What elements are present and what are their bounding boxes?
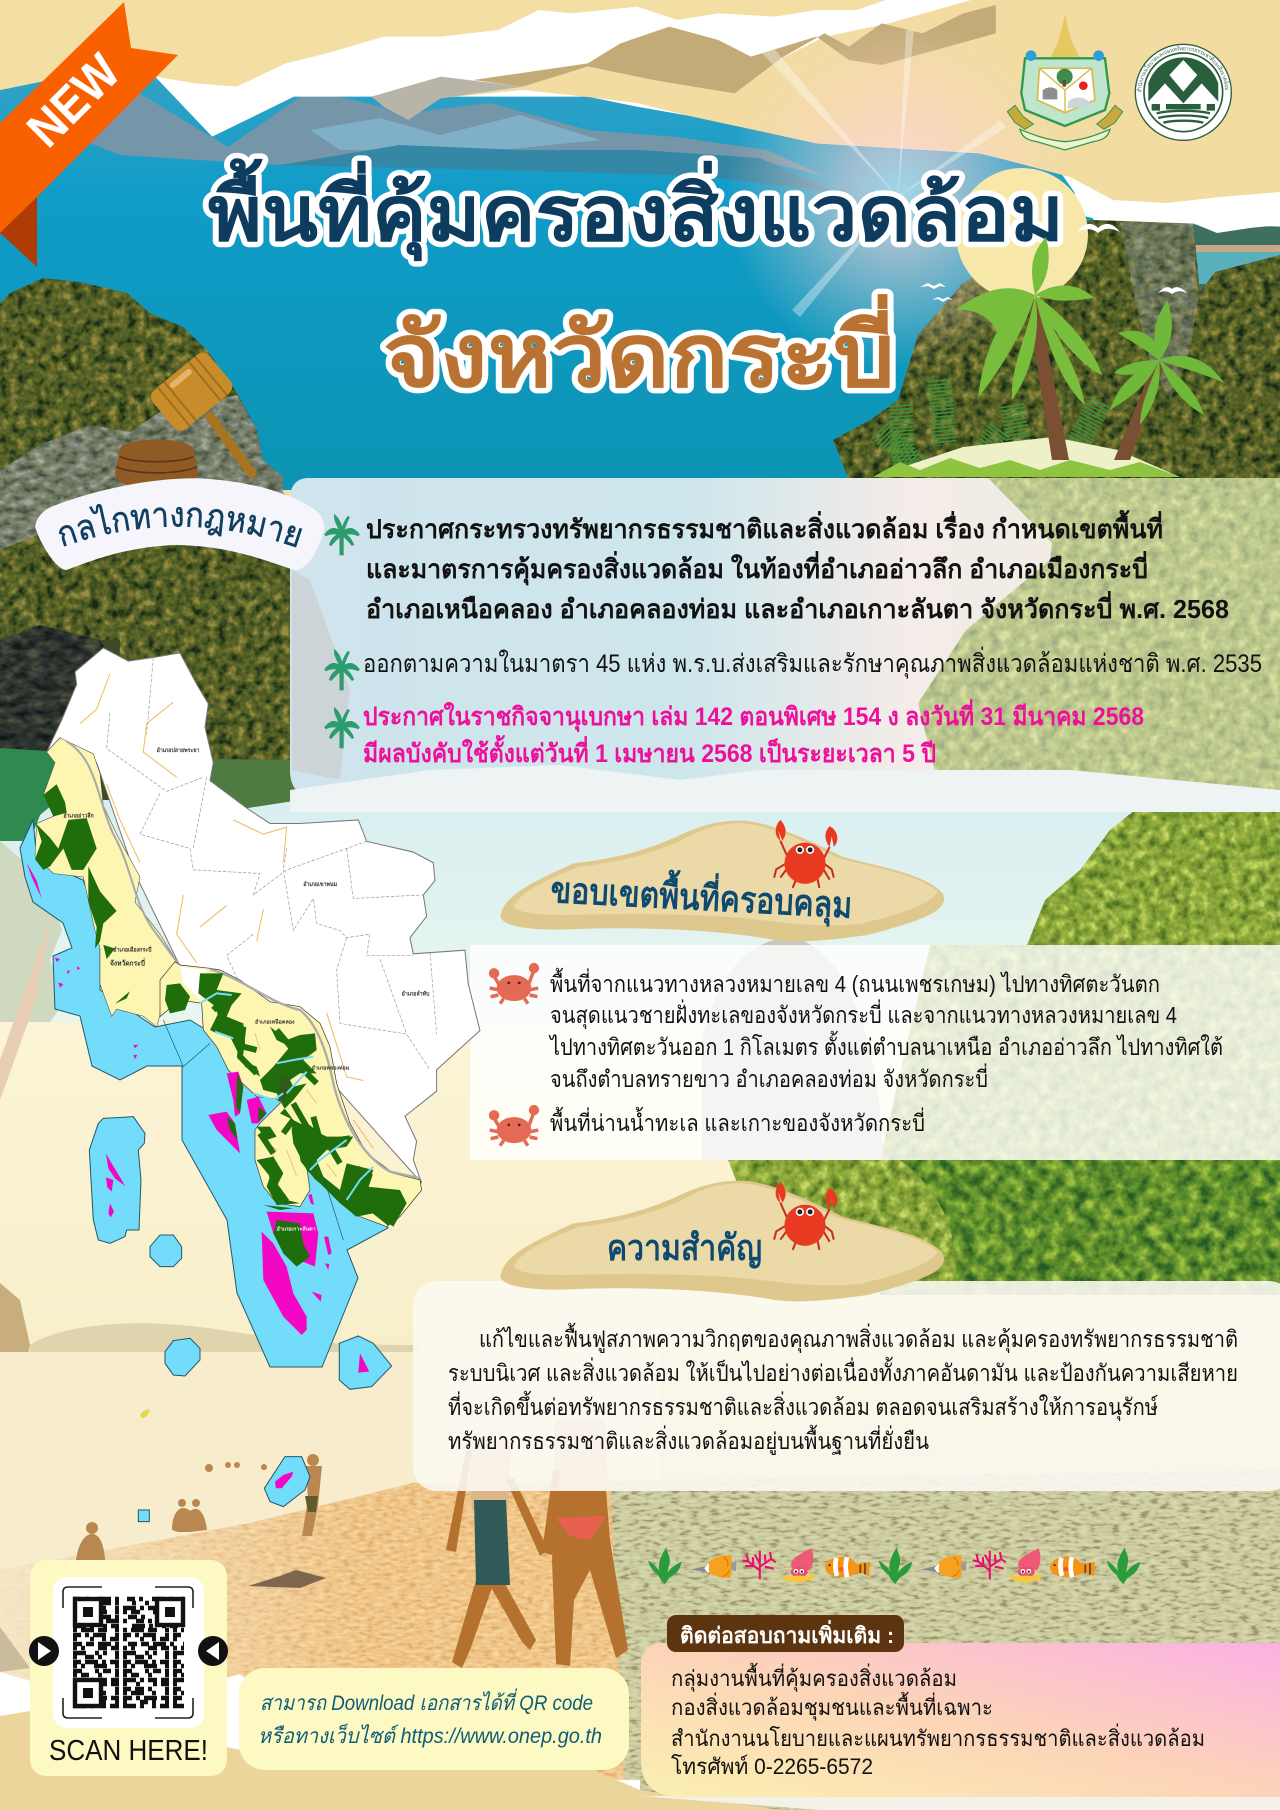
ribbon label: NEW bbox=[16, 43, 131, 158]
background: left rock bbox=[0, 1283, 30, 1364]
sun bbox=[1079, 81, 1088, 90]
Lanta island north bbox=[267, 1212, 318, 1267]
southern islands bbox=[89, 1117, 392, 1522]
palm fronds large bbox=[955, 237, 1102, 405]
background: rock behind panel 2 bbox=[702, 938, 883, 1160]
statement lines: และมาตรการคุ้มครองสิ่งแวดล้อม ในท้องที่อำเภออ่าวลึก อำเภอเมืองกระบี่ bbox=[366, 550, 1148, 586]
palm bullet 3 bbox=[325, 710, 359, 748]
background: tree top right bbox=[1020, 806, 1280, 1000]
contact details: โทรศัพท์ 0-2265-6572 bbox=[671, 1754, 873, 1779]
woman body bbox=[552, 1490, 628, 1666]
sea creature decorative row bbox=[648, 1547, 1140, 1584]
highway east bbox=[210, 969, 420, 1178]
map labels north: จังหวัดกระบี่ bbox=[110, 957, 146, 968]
crab bullet 1 bbox=[489, 963, 539, 1004]
dark forest patch bbox=[278, 1077, 290, 1102]
woman arm bbox=[542, 1470, 560, 1555]
bikini bbox=[556, 1516, 606, 1540]
labels: อำเภอคลองท่อม bbox=[312, 1064, 350, 1071]
background: olive hill behind heading bbox=[728, 1160, 956, 1290]
outer shield bbox=[1021, 58, 1109, 126]
background: left hill upper bbox=[0, 278, 293, 640]
background: left hill grey rock bbox=[0, 395, 283, 550]
background: torn paper bottom right bbox=[640, 1796, 1280, 1810]
highway west bbox=[67, 741, 180, 966]
logo: ONEP circular emblem bbox=[1134, 44, 1232, 141]
palm bullet 1 bbox=[325, 517, 359, 555]
map labels north: อำเภอเมืองกระบี่ bbox=[113, 945, 152, 953]
label pill: legal mechanism: กลไกทางกฎหมาย bbox=[58, 504, 302, 548]
QR finder patterns bbox=[75, 1599, 183, 1706]
background: mid sky band bbox=[0, 800, 1280, 1060]
label pill: legal mechanism bbox=[35, 478, 324, 570]
background: beach water bbox=[0, 1352, 660, 1592]
map labels north: อำเภอปลายพระยา bbox=[157, 746, 199, 754]
man torso faint bbox=[468, 1440, 512, 1510]
arrow right bbox=[198, 1636, 228, 1666]
download note: สามารถ Download เอกสารได้ที่ QR code bbox=[260, 1688, 593, 1715]
heading: coverage: ขอบเขตพื้นที่ครอบคลุม bbox=[549, 863, 854, 929]
background: beige lower band bbox=[0, 1022, 1280, 1352]
QR modules bbox=[73, 1599, 184, 1706]
contact details: สำนักงานนโยบายและแผนทรัพยากรธรรมชาติและสิ่งแวดล้อม bbox=[671, 1723, 1205, 1751]
QR corner brackets bbox=[63, 1587, 193, 1718]
contour lines bbox=[80, 674, 373, 1148]
panel: importance: ทรัพยากรธรรมชาติและสิ่งแวดล้อมอยู่บนพื้นฐานที่ยั่งยืน bbox=[448, 1425, 929, 1455]
background: large leaf decoration bbox=[0, 841, 66, 1100]
yellow western strip bbox=[35, 738, 180, 1027]
sun rays bbox=[759, 30, 1006, 317]
satellite islands bbox=[150, 1235, 182, 1267]
background: left hill dark base bbox=[0, 625, 125, 765]
gavel handle bbox=[210, 417, 252, 473]
background: green grass left bbox=[0, 748, 70, 841]
district boundaries bbox=[107, 657, 437, 1070]
Lanta labels: อำเภอเกาะลันตา bbox=[277, 1226, 316, 1233]
heading: coverage bbox=[501, 820, 944, 941]
sun disc bbox=[956, 168, 1088, 300]
gazette lines bbox=[363, 699, 1144, 768]
palm trunk large bbox=[1027, 300, 1069, 460]
heading: importance bbox=[501, 1181, 944, 1301]
pale tan main paper bbox=[441, 0, 1280, 203]
statement lines: อำเภอเหนือคลอง อำเภอคลองท่อม และอำเภอเกาะลันตา จังหวัดกระบี่ พ.ศ. 2568 bbox=[366, 590, 1229, 624]
white patch at Krabi town bbox=[180, 967, 207, 1000]
white edge right bbox=[1070, 175, 1280, 233]
logo: ONEP circular emblem: สำนักงานนโยบายและแผนทรัพยากรธรรมชาติและสิ่งแวดล้อม bbox=[1136, 46, 1230, 92]
palm fronds small bbox=[1110, 300, 1224, 425]
download note bbox=[239, 1668, 629, 1770]
mound bbox=[873, 437, 1180, 477]
background: far hills over beach bbox=[30, 1323, 420, 1352]
island group west bbox=[89, 1117, 145, 1243]
sand blob bbox=[501, 821, 944, 941]
waves bbox=[1067, 97, 1092, 109]
scan here label: SCAN HERE! bbox=[49, 1735, 208, 1767]
coverage text bbox=[548, 968, 1223, 1136]
coverage text: พื้นที่จากแนวทางหลวงหมายเลข 4 (ถนนเพชรเกษม) ไปทางทิศตะวันตก bbox=[550, 968, 1160, 997]
white inland districts bbox=[47, 648, 480, 1183]
yellow eastern strip bbox=[160, 962, 422, 1227]
small pink islands bbox=[312, 1237, 332, 1302]
contact heading tag bbox=[667, 1615, 904, 1652]
title line 2: จังหวัดกระบี่ bbox=[383, 294, 895, 405]
panel: importance: ที่จะเกิดขึ้นต่อทรัพยากรธรรมชาติและสิ่งแวดล้อม ตลอดจนเสริมสร้างให้การอนุรักษ์ bbox=[448, 1391, 1158, 1421]
palm trees and ferns bbox=[873, 237, 1224, 477]
map labels north bbox=[63, 746, 430, 998]
eastern coast bbox=[160, 962, 422, 1240]
green on islands bbox=[227, 1073, 267, 1140]
Lanta island south bbox=[262, 1232, 307, 1335]
palm bullet 2 bbox=[325, 652, 359, 690]
palm trunk small bbox=[1114, 363, 1165, 460]
QR white tile bbox=[53, 1577, 204, 1728]
background: left hill olive base bbox=[118, 640, 293, 765]
contact details: กองสิ่งแวดล้อมชุมชนและพื้นที่เฉพาะ bbox=[671, 1692, 993, 1721]
darker torn shadow band bbox=[473, 5, 996, 93]
man legs bbox=[452, 1580, 494, 1668]
background: green grass right bbox=[120, 758, 300, 808]
panel: legal mechanism bbox=[290, 478, 1280, 812]
man arm bbox=[446, 1450, 472, 1552]
top torn paper bbox=[0, 0, 1280, 233]
ribbon bbox=[1007, 105, 1123, 129]
grass fringe bbox=[873, 458, 1180, 477]
mangrove forest bbox=[165, 973, 407, 1227]
background: sand beach right bbox=[610, 1470, 1280, 1810]
crab bullet 2 bbox=[489, 1105, 539, 1146]
arrow left bbox=[29, 1636, 59, 1666]
contact heading tag: ติดต่อสอบถามเพิ่มเติม : bbox=[680, 1619, 894, 1648]
background: sea photo bbox=[0, 0, 1280, 490]
emblem body bbox=[1148, 57, 1218, 103]
faded cliff through panel left bbox=[292, 570, 350, 780]
sun glow bbox=[725, 20, 1075, 370]
icon: gavel bbox=[115, 349, 252, 489]
birds bbox=[920, 224, 1187, 302]
map: Krabi protected area bbox=[20, 648, 480, 1522]
background: forest right of heading bbox=[880, 1160, 1280, 1295]
QR code card bbox=[29, 1560, 228, 1776]
torn lower edge bbox=[290, 765, 1280, 812]
shorts bbox=[474, 1500, 510, 1585]
contact details: กลุ่มงานพื้นที่คุ้มครองสิ่งแวดล้อม bbox=[671, 1663, 957, 1692]
blue orbs bbox=[1026, 50, 1036, 61]
zone dividers bbox=[163, 1020, 343, 1240]
panel: coverage bbox=[470, 945, 1280, 1160]
title line 1: พื้นที่คุ้มครองสิ่งแวดล้อม bbox=[208, 158, 1064, 262]
statement lines: ประกาศกระทรวงทรัพยากรธรรมชาติและสิ่งแวดล้อม เรื่อง กำหนดเขตพื้นที่ bbox=[366, 509, 1163, 544]
new ribbon bbox=[0, 2, 178, 267]
tree bbox=[1057, 69, 1073, 85]
labels: อำเภอเหนือคลอง bbox=[255, 1018, 295, 1025]
ferns bbox=[880, 380, 1100, 470]
background: left hill base fill bbox=[0, 600, 300, 800]
background: rock at left shore bbox=[0, 1627, 30, 1672]
faded forest through panel right bbox=[918, 478, 1280, 790]
background: couple walking bbox=[446, 1420, 628, 1668]
background: strait behind cliffs bbox=[1190, 225, 1280, 295]
statement lines bbox=[366, 509, 1229, 624]
contact details bbox=[671, 1663, 1205, 1779]
inner shield bbox=[1037, 68, 1095, 113]
gazette lines: ประกาศในราชกิจจานุเบกษา เล่ม 142 ตอนพิเศษ 154 ง ลงวันที่ 31 มีนาคม 2568 bbox=[363, 699, 1144, 733]
background: grey cliff face bbox=[1120, 222, 1198, 400]
contact panel bbox=[641, 1615, 1280, 1797]
background: torn paper white bottom bbox=[0, 1672, 640, 1810]
background: pale sand overlay bbox=[0, 1480, 650, 1810]
sea zone bbox=[20, 820, 388, 1367]
background: torn paper tan bottom bbox=[0, 1706, 780, 1810]
coverage text: พื้นที่น่านน้ำทะเล และเกาะของจังหวัดกระบี่ bbox=[550, 1107, 925, 1136]
gavel head bbox=[147, 349, 236, 434]
background: sand beach left bbox=[0, 1480, 650, 1810]
red crab bbox=[774, 820, 837, 888]
pink reserve islands bbox=[208, 1072, 314, 1205]
white torn layer bbox=[0, 0, 1280, 227]
elephant bbox=[1043, 87, 1057, 99]
background: forest behind panel 2 bbox=[880, 945, 1280, 1160]
background: swimmers and sunbathers bbox=[76, 1454, 326, 1588]
coverage text: จนสุดแนวชายฝั่งทะเลของจังหวัดกระบี่ และจากแนวทางหลวงหมายเลข 4 bbox=[550, 999, 1177, 1029]
map labels north: อำเภออ่าวลึก bbox=[63, 812, 94, 819]
mangrove branches bbox=[210, 980, 400, 1223]
pink reserve islets west bbox=[27, 863, 138, 1059]
mangrove and forest green west bbox=[35, 784, 130, 1004]
man far arm bbox=[506, 1478, 548, 1556]
coverage text: จนถึงตำบลทรายขาว อำเภอคลองท่อม จังหวัดกระบี่ bbox=[550, 1063, 988, 1092]
contours bbox=[255, 1033, 337, 1177]
channels bbox=[200, 993, 373, 1200]
panel: importance bbox=[413, 1281, 1280, 1491]
land layers bbox=[27, 648, 480, 1183]
download note: หรือทางเว็บไซต์ https://www.onep.go.th bbox=[258, 1723, 602, 1748]
gazette lines: มีผลบังคับใช้ตั้งแต่วันที่ 1 เมษายน 2568 เป็นระยะเวลา 5 ปี bbox=[363, 734, 936, 768]
gavel sound block bbox=[115, 440, 198, 489]
map labels north: อำเภอเขาพนม bbox=[303, 881, 337, 888]
grey shadow band bbox=[371, 77, 522, 120]
upper tan paper bbox=[0, 0, 886, 90]
logo: Krabi province seal bbox=[1007, 15, 1123, 150]
woman torso faint bbox=[553, 1420, 608, 1490]
heading: importance: ความสำคัญ bbox=[607, 1227, 762, 1269]
spire bbox=[1050, 15, 1080, 58]
background: right cliffs bbox=[833, 220, 1280, 480]
map labels north: อำเภอลำทับ bbox=[402, 990, 430, 998]
red crab bbox=[774, 1182, 837, 1250]
labels bbox=[255, 1018, 350, 1071]
background: distant mountains bbox=[90, 90, 835, 192]
ring lettering bbox=[1141, 50, 1225, 92]
